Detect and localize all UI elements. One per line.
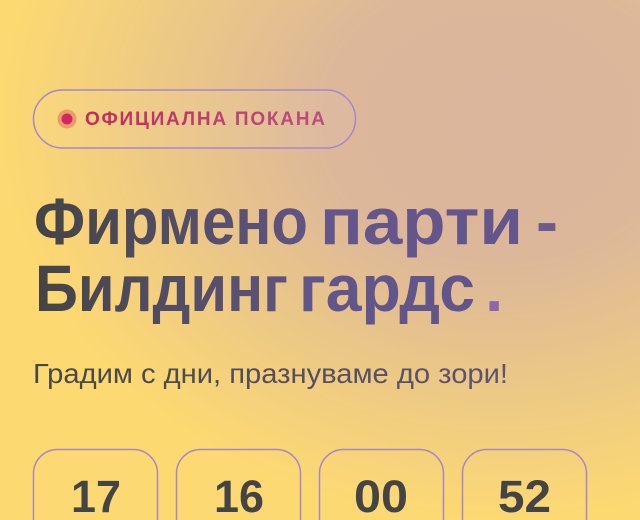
title: - (536, 184, 558, 258)
countdown box: 16 (176, 450, 300, 520)
subtitle: Градим с дни, празнуваме до зори! (33, 358, 508, 389)
badge label: ОФИЦИАЛНА ПОКАНА (85, 109, 325, 130)
title: . (485, 251, 503, 325)
countdown box: 17 (34, 450, 158, 520)
countdown (34, 450, 586, 520)
title: Билдинг (35, 251, 288, 325)
badge: official invitation (34, 90, 356, 148)
title: Фирмено (34, 184, 308, 258)
title (34, 184, 558, 325)
countdown box: 00 (320, 450, 444, 520)
icon: pulsing dot (58, 110, 76, 128)
title: парти (320, 184, 523, 258)
title: гардс (299, 251, 475, 325)
countdown box: 52 (462, 450, 586, 520)
